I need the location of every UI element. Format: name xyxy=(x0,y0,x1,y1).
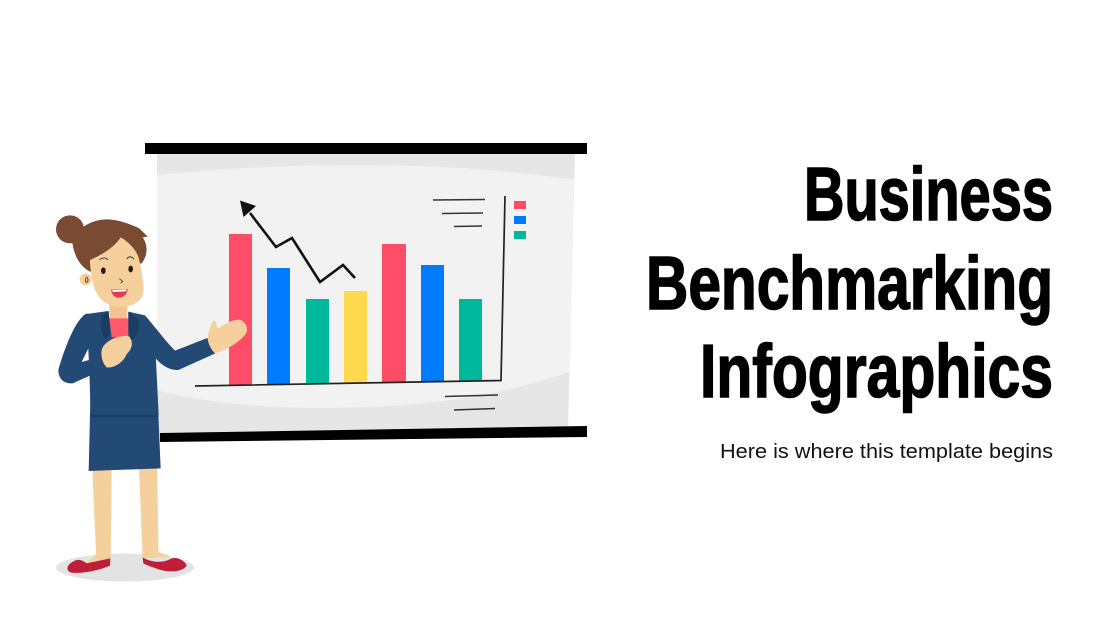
left arm xyxy=(58,313,110,383)
presenter character xyxy=(56,215,247,581)
trend arrow xyxy=(240,200,355,282)
mouth xyxy=(111,289,128,298)
shirt xyxy=(109,318,130,340)
jacket body xyxy=(87,311,159,415)
bar chart xyxy=(195,196,505,386)
eyes and brows xyxy=(101,267,106,274)
skirt xyxy=(89,415,161,471)
chart notes: bottom lines xyxy=(445,395,498,410)
legs and shoes xyxy=(67,415,187,573)
hand on chest xyxy=(101,336,132,367)
hair back xyxy=(56,215,84,243)
projection screen xyxy=(145,143,587,442)
pointing hand xyxy=(208,320,247,353)
neck xyxy=(109,297,127,322)
ear xyxy=(80,273,92,285)
face xyxy=(90,237,143,307)
floor shadow xyxy=(56,554,194,582)
subtitle: Here is where this template begins xyxy=(720,440,1053,463)
right arm xyxy=(145,315,215,370)
legend xyxy=(514,201,526,239)
title xyxy=(646,152,1053,413)
chart notes: top lines xyxy=(433,200,485,226)
